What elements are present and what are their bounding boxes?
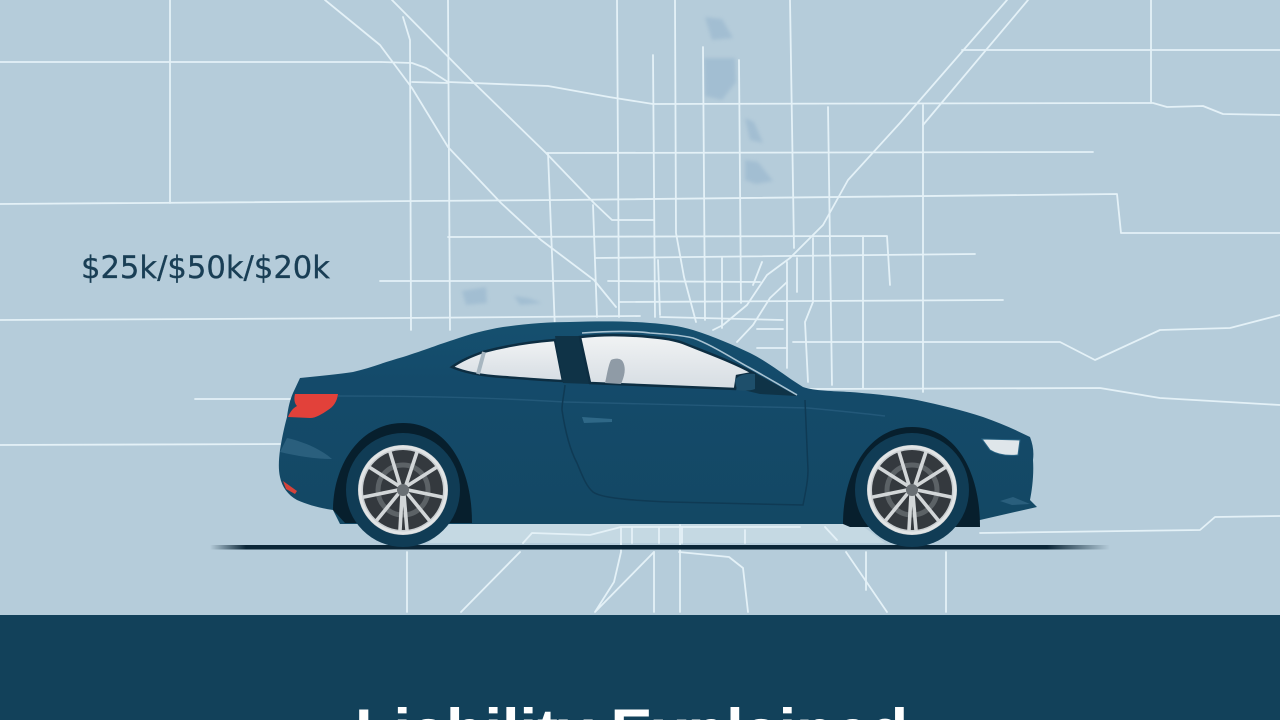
title banner	[0, 615, 1280, 720]
roof chrome strip	[582, 332, 797, 395]
banner background	[0, 615, 1280, 720]
front wheel arch	[843, 427, 980, 527]
city map water patches	[462, 17, 773, 305]
side mirror	[735, 374, 755, 391]
seat silhouette	[605, 359, 625, 384]
car illustration	[279, 321, 1037, 547]
rear wheel	[346, 433, 460, 547]
ground shadow	[210, 545, 1110, 550]
car body	[279, 321, 1037, 524]
front splitter highlight	[1000, 497, 1030, 505]
headlight	[982, 439, 1020, 455]
front wheel	[855, 433, 969, 547]
coverage limits label: $25k/$50k/$20k	[81, 250, 330, 286]
tail light	[288, 394, 338, 418]
rear reflector	[283, 481, 297, 494]
mirror base shadow	[735, 373, 797, 396]
rear wheel arch	[333, 423, 472, 523]
rear window brace	[478, 352, 484, 374]
door outline	[562, 385, 808, 505]
front side window	[580, 335, 753, 389]
rear side window	[452, 340, 563, 381]
rear bumper highlight	[280, 438, 332, 459]
door handle	[582, 417, 612, 423]
pale ground band under car	[428, 524, 885, 543]
door pillar	[555, 336, 590, 384]
character line	[338, 396, 885, 416]
